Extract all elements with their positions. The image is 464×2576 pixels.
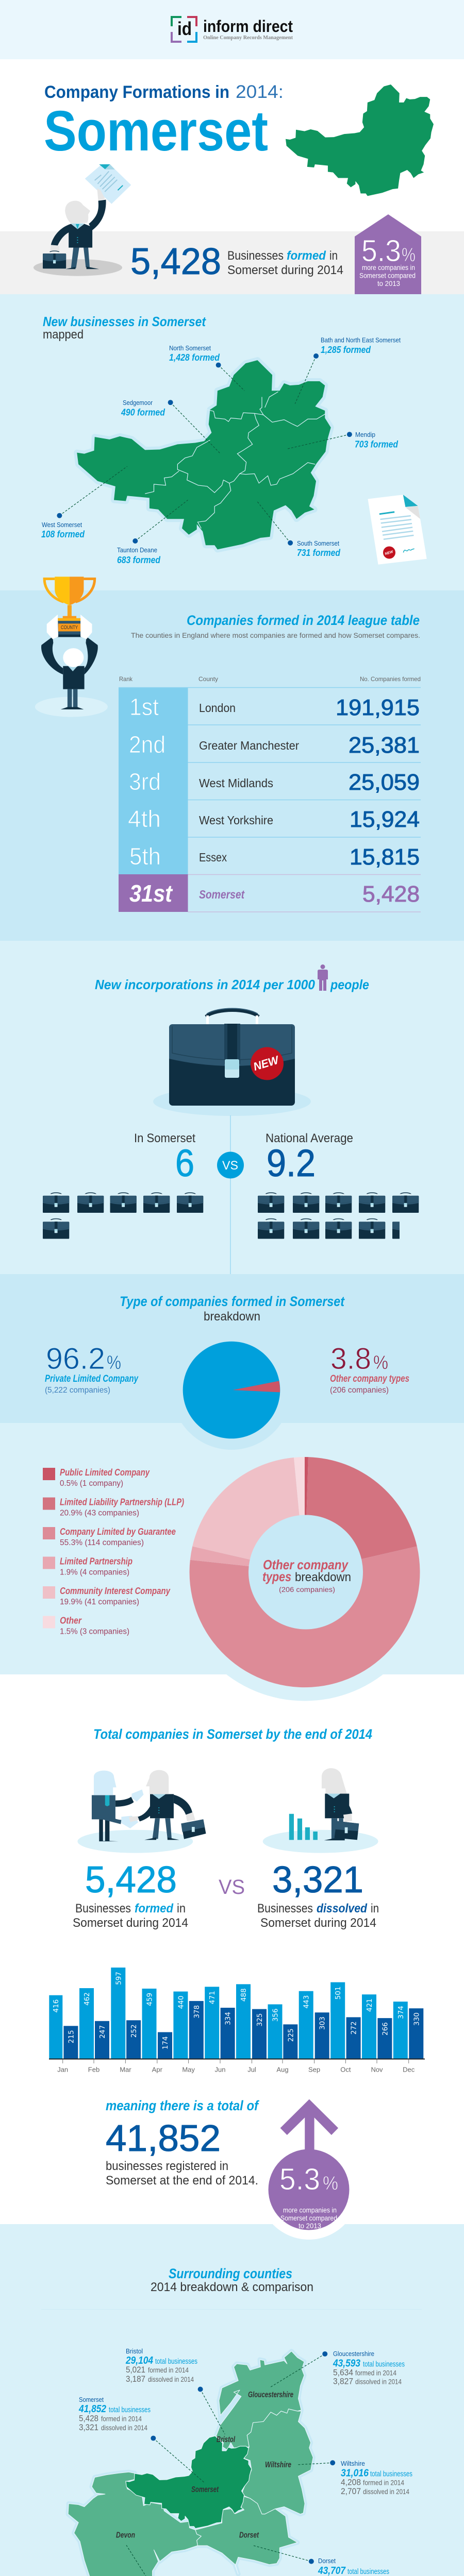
table: companies formed league: 2nd xyxy=(129,731,165,758)
bar chart: monthly formed and dissolved: 356 xyxy=(271,2008,279,2022)
callout: arrow 5.3% growth: 5.3 xyxy=(279,2162,320,2196)
bar chart: monthly formed and dissolved: 325 xyxy=(256,2013,264,2026)
callout: Somerset: dissolved in 2014 xyxy=(101,2424,147,2432)
bar chart: monthly formed and dissolved: 378 xyxy=(193,2005,201,2019)
bar chart: monthly formed and dissolved: 462 xyxy=(83,1992,91,2006)
stat: formed vs dissolved: Somerset during 2014 xyxy=(260,1916,376,1930)
logo: inform direct xyxy=(172,17,293,42)
table: companies formed league: London xyxy=(199,701,236,715)
stat: formed vs dissolved: Businesses xyxy=(75,1902,131,1916)
callout: Bristol: 29,104 xyxy=(125,2355,153,2366)
stat: 5,428 businesses formed: Somerset during 2014 xyxy=(227,263,343,277)
map labels: districts: 1,428 formed xyxy=(169,352,220,363)
bar chart: monthly formed and dissolved: 421 xyxy=(366,1998,374,2012)
table: companies formed league: 191,915 xyxy=(336,695,420,720)
heading: type of companies: Type of companies formed in Somerset xyxy=(120,1294,345,1309)
bar chart: monthly formed and dissolved: 374 xyxy=(397,2006,405,2019)
legend: other company types: 0.5% (1 company) xyxy=(60,1479,123,1488)
title: Company Formations in xyxy=(44,82,229,102)
icon: new company document: NEW xyxy=(385,550,394,556)
callout: 5.3% more companies: Somerset compared xyxy=(359,271,416,279)
table: companies formed league: 15,924 xyxy=(350,807,420,832)
stat: formed vs dissolved: formed xyxy=(135,1902,174,1916)
callout: Somerset: formed in 2014 xyxy=(101,2414,142,2422)
map labels: districts xyxy=(41,336,401,565)
callout: Bristol: 3,187 xyxy=(126,2374,145,2384)
bar chart: monthly formed and dissolved: 440 xyxy=(177,1996,185,2009)
table: companies formed league: County xyxy=(198,675,218,683)
callout: Dorset xyxy=(318,2557,389,2576)
legend: other company types: Company Limited by Guarantee xyxy=(60,1527,176,1537)
callout: Dorset: Dorset xyxy=(318,2557,336,2565)
stat: 5,428 businesses formed: formed xyxy=(287,249,326,263)
illustration: man holding county trophy xyxy=(35,577,108,717)
callout: arrow 5.3% growth: Somerset compared xyxy=(280,2214,337,2222)
bar chart: monthly formed and dissolved: Mar xyxy=(120,2066,131,2073)
callout: Somerset: 3,321 xyxy=(79,2422,98,2432)
stat: formed vs dissolved: 3,321 xyxy=(272,1859,363,1901)
map: surrounding counties: Somerset xyxy=(191,2485,219,2494)
callout: Wiltshire: 4,208 xyxy=(341,2477,361,2487)
heading: new incorporations per 1000 people: people xyxy=(330,977,369,992)
heading: surrounding counties: 2014 breakdown & comparison xyxy=(151,2280,313,2294)
callout: 5.3% more companies xyxy=(355,214,421,294)
table: companies formed league: Rank xyxy=(119,675,133,683)
table: companies formed league: Greater Manchester xyxy=(199,739,299,752)
stat: 5,428 businesses formed xyxy=(130,241,343,282)
table: companies formed league: 4th xyxy=(128,805,161,832)
illustration: businessman holding certificate xyxy=(34,164,131,276)
callout: Bristol: Bristol xyxy=(126,2347,143,2355)
callout: 5.3% more companies: 5.3 xyxy=(361,234,401,268)
illustration: man holding county trophy: COUNTY xyxy=(61,625,78,631)
callout: Gloucestershire: dissolved in 2014 xyxy=(355,2378,402,2386)
bar chart: monthly formed and dissolved: Nov xyxy=(371,2066,383,2073)
bar chart: monthly formed and dissolved: 252 xyxy=(130,2024,138,2038)
map labels: districts: South Somerset xyxy=(297,539,339,547)
legend: other company types: Limited Liability Partnership (LLP) xyxy=(60,1497,184,1507)
callout: arrow 5.3% growth: to 2013 xyxy=(299,2222,321,2230)
heading: new businesses mapped: New businesses in Somerset xyxy=(43,314,206,329)
callout: 5.3% more companies: % xyxy=(402,244,416,266)
legend: other company types: Other xyxy=(60,1616,82,1626)
map: surrounding counties: Devon xyxy=(116,2531,135,2540)
heading: companies formed league table: Companies formed in 2014 league table xyxy=(187,613,420,628)
map labels: districts: Mendip xyxy=(355,431,375,438)
callout: Wiltshire xyxy=(341,2460,412,2496)
title: 2014: xyxy=(236,82,284,102)
callout: Somerset xyxy=(78,2396,151,2432)
map labels: districts: North Somerset xyxy=(169,344,211,352)
callout: Bristol: 5,021 xyxy=(126,2365,145,2375)
legend: other company types: 55.3% (114 companies) xyxy=(60,1538,144,1547)
table: companies formed league: West Yorkshire xyxy=(199,814,273,827)
bar chart: monthly formed and dissolved: Dec xyxy=(403,2066,415,2073)
map: surrounding counties xyxy=(68,2351,335,2576)
stat: 41,852 total businesses: 41,852 xyxy=(106,2118,221,2159)
stat: formed vs dissolved: Somerset during 2014 xyxy=(73,1916,188,1930)
stat: 41,852 total businesses: businesses registered in xyxy=(106,2159,228,2173)
map labels: districts: 1,285 formed xyxy=(321,345,371,355)
map labels: districts: Sedgemoor xyxy=(123,399,153,406)
heading: type of companies: breakdown xyxy=(204,1310,260,1324)
bar chart: monthly formed and dissolved: May xyxy=(182,2066,195,2073)
bar chart: monthly formed and dissolved: 247 xyxy=(98,2025,107,2039)
legend: other company types xyxy=(43,1467,184,1636)
callout: arrow 5.3% growth: % xyxy=(323,2173,338,2194)
stat: formed vs dissolved: VS xyxy=(219,1876,245,1899)
pictogram: briefcases national 9.2 xyxy=(258,1192,419,1239)
pictogram: briefcases Somerset 6 xyxy=(43,1192,203,1239)
callout: 5.3% more companies: to 2013 xyxy=(377,279,400,287)
comparison: incorporations per 1000: National Average xyxy=(266,1131,353,1145)
table: companies formed league: 25,059 xyxy=(349,770,420,795)
table: companies formed league: 31st xyxy=(129,880,173,907)
callout: Gloucestershire: total businesses xyxy=(363,2360,405,2368)
stat: 41,852 total businesses xyxy=(106,2098,260,2188)
callout: Wiltshire: formed in 2014 xyxy=(363,2478,404,2486)
table: companies formed league: West Midlands xyxy=(199,776,273,790)
bar chart: monthly formed and dissolved: Sep xyxy=(308,2066,320,2073)
map labels: districts: 108 formed xyxy=(41,529,85,539)
map labels: districts: 731 formed xyxy=(297,548,341,558)
map: surrounding counties: Gloucestershire xyxy=(248,2391,293,2399)
comparison: incorporations per 1000 xyxy=(134,1115,353,1274)
stat: formed vs dissolved: in xyxy=(177,1902,186,1916)
callout: Gloucestershire: 5,634 xyxy=(333,2368,353,2378)
legend: other company types: Community Interest Company xyxy=(60,1586,171,1596)
table: companies formed league: Somerset xyxy=(199,888,245,901)
donut chart: other company types: types xyxy=(262,1569,291,1584)
map labels: districts: Bath and North East Somerset xyxy=(321,336,401,344)
bar chart: monthly formed and dissolved: 443 xyxy=(303,1995,311,2008)
map labels: districts: 490 formed xyxy=(121,407,165,417)
pie chart: company types xyxy=(172,1330,291,1450)
callout: arrow 5.3% growth: more companies in xyxy=(283,2206,337,2214)
stat: formed vs dissolved: 5,428 xyxy=(85,1859,177,1901)
comparison: incorporations per 1000: In Somerset xyxy=(134,1131,195,1145)
stat: formed vs dissolved: in xyxy=(371,1902,379,1916)
bar chart: monthly formed and dissolved: 272 xyxy=(350,2021,358,2035)
callout: Somerset: total businesses xyxy=(109,2405,151,2414)
stat: formed vs dissolved: dissolved xyxy=(317,1902,368,1916)
bar chart: monthly formed and dissolved: 330 xyxy=(412,2012,421,2026)
bar chart: monthly formed and dissolved: 597 xyxy=(114,1972,123,1985)
map labels: districts: Taunton Deane xyxy=(117,546,157,554)
bar chart: monthly formed and dissolved: 303 xyxy=(319,2016,327,2030)
heading: type of companies xyxy=(120,1294,345,1324)
callout: Wiltshire: 31,016 xyxy=(341,2467,369,2479)
legend: other company types: 19.9% (41 companies) xyxy=(60,1598,139,1606)
heading: new incorporations per 1000 people xyxy=(95,964,369,992)
callout: 5.3% more companies: more companies in xyxy=(362,263,415,272)
bar chart: monthly formed and dissolved: 215 xyxy=(67,2030,75,2043)
bar chart: monthly formed and dissolved: 488 xyxy=(240,1988,248,2002)
bar chart: monthly formed and dissolved: Feb xyxy=(88,2066,100,2073)
legend: other company types: 1.5% (3 companies) xyxy=(60,1627,129,1636)
stat: formed vs dissolved: Businesses xyxy=(257,1902,313,1916)
table: companies formed league: 25,381 xyxy=(349,733,420,758)
map labels: districts: 703 formed xyxy=(355,439,399,449)
stat: private limited share: (5,222 companies) xyxy=(45,1386,110,1395)
illustration: man with falling bars xyxy=(263,1768,378,1853)
callout: Wiltshire: Wiltshire xyxy=(341,2460,365,2467)
map labels: districts: 683 formed xyxy=(117,555,161,565)
map: surrounding counties: Bristol xyxy=(217,2435,235,2444)
stat: other company types share xyxy=(330,1342,409,1395)
donut chart: other company types: (206 companies) xyxy=(279,1585,335,1594)
table: companies formed league: 1st xyxy=(129,693,159,720)
stat: other company types share: 3.8 xyxy=(330,1342,371,1376)
callout: Somerset: 5,428 xyxy=(79,2413,98,2424)
callout: Somerset: Somerset xyxy=(79,2396,104,2403)
bar chart: monthly formed and dissolved: 471 xyxy=(208,1991,217,2004)
stat: private limited share: 96.2 xyxy=(46,1342,105,1376)
map labels: districts: West Somerset xyxy=(42,521,82,529)
callout: Gloucestershire: 43,593 xyxy=(333,2358,360,2369)
table: companies formed league: 15,815 xyxy=(350,844,420,870)
callout: Gloucestershire xyxy=(333,2350,405,2386)
table: companies formed league: 5th xyxy=(129,843,161,870)
callout: Bristol: formed in 2014 xyxy=(148,2366,189,2374)
icon: big briefcase with new sticker xyxy=(153,1009,311,1116)
stat: 5,428 businesses formed: Businesses xyxy=(227,249,284,263)
bar chart: monthly formed and dissolved: 501 xyxy=(334,1987,342,1999)
table: companies formed league: No. Companies formed xyxy=(360,675,421,683)
callout: Gloucestershire: Gloucestershire xyxy=(333,2350,374,2358)
comparison: incorporations per 1000: 6 xyxy=(175,1142,194,1184)
heading: surrounding counties: Surrounding counties xyxy=(169,2266,292,2281)
title: Somerset xyxy=(44,99,268,163)
stat: other company types share: (206 companies) xyxy=(330,1386,389,1395)
stat: 5,428 businesses formed: in xyxy=(329,249,338,263)
stat: private limited share: % xyxy=(107,1352,121,1374)
comparison: incorporations per 1000: VS xyxy=(222,1159,238,1173)
map: Somerset districts xyxy=(57,353,352,549)
bar chart: monthly formed and dissolved: 416 xyxy=(52,1999,60,2012)
donut chart: other company types: breakdown xyxy=(295,1570,351,1584)
hero map of Somerset xyxy=(286,84,434,196)
bar chart: monthly formed and dissolved: Oct xyxy=(340,2066,351,2073)
table: companies formed league: 3rd xyxy=(129,768,161,795)
stat: private limited share xyxy=(45,1342,139,1395)
callout: Bristol xyxy=(125,2347,197,2384)
heading: new incorporations per 1000 people: New incorporations in 2014 per 1000 xyxy=(95,977,316,992)
donut chart: other company types: Other company xyxy=(263,1557,349,1572)
table: companies formed league: Essex xyxy=(199,851,227,864)
illustration: handshake xyxy=(77,1770,206,1853)
bar chart: monthly formed and dissolved xyxy=(49,1968,425,2073)
table: companies formed league xyxy=(119,675,421,912)
callout: arrow 5.3% growth xyxy=(259,2099,359,2240)
stat: private limited share: Private Limited Company xyxy=(45,1374,139,1384)
icon: new company document xyxy=(368,495,427,565)
heading: companies formed league table xyxy=(131,613,420,639)
legend: other company types: Limited Partnership xyxy=(60,1556,132,1566)
logo: inform direct: inform direct xyxy=(203,17,293,36)
map: surrounding counties: Wiltshire xyxy=(265,2461,291,2469)
callout: Wiltshire: total businesses xyxy=(370,2469,412,2478)
callout: Bristol: dissolved in 2014 xyxy=(148,2375,194,2383)
legend: other company types: Public Limited Company xyxy=(60,1467,150,1478)
donut chart: other company types xyxy=(176,1444,434,1701)
stat: 5,428 businesses formed: 5,428 xyxy=(130,241,221,282)
callout: Wiltshire: 2,707 xyxy=(341,2486,361,2496)
legend: other company types: 20.9% (43 companies) xyxy=(60,1509,139,1518)
stat: 41,852 total businesses: meaning there is a total of xyxy=(106,2098,260,2113)
bar chart: monthly formed and dissolved: Jul xyxy=(247,2066,256,2073)
bar chart: monthly formed and dissolved: Jan xyxy=(57,2066,68,2073)
bar chart: monthly formed and dissolved: Jun xyxy=(215,2066,225,2073)
icon: big briefcase with new sticker: NEW xyxy=(252,1053,281,1073)
heading: total companies by end of 2014: Total companies in Somerset by the end of 2014 xyxy=(93,1726,372,1742)
comparison: incorporations per 1000: 9.2 xyxy=(267,1142,316,1184)
bar chart: monthly formed and dissolved: Apr xyxy=(152,2066,163,2073)
stat: other company types share: % xyxy=(373,1352,388,1374)
heading: companies formed league table: The counties in England where most companies are formed and how Somerset compares. xyxy=(131,632,420,639)
bar chart: monthly formed and dissolved: 174 xyxy=(161,2036,170,2049)
stat: other company types share: Other company types xyxy=(330,1374,409,1384)
logo: inform direct: Online Company Records Management xyxy=(203,35,293,41)
heading: new businesses mapped xyxy=(43,314,206,342)
bar chart: monthly formed and dissolved: Aug xyxy=(276,2066,289,2073)
bar chart: monthly formed and dissolved: 266 xyxy=(381,2022,389,2036)
stat: 41,852 total businesses: Somerset at the end of 2014. xyxy=(106,2174,258,2188)
callout: Dorset: total businesses xyxy=(347,2567,389,2576)
callout: Wiltshire: dissolved in 2014 xyxy=(363,2487,409,2496)
bar chart: monthly formed and dissolved: 459 xyxy=(145,1993,154,2006)
stat: formed vs dissolved xyxy=(73,1859,379,1930)
table: companies formed league: 5,428 xyxy=(362,882,420,907)
heading: new businesses mapped: mapped xyxy=(43,328,84,342)
callout: Bristol: total businesses xyxy=(155,2357,197,2366)
bar chart: monthly formed and dissolved: 225 xyxy=(287,2028,295,2042)
logo: inform direct: id xyxy=(177,18,192,39)
callout: Gloucestershire: 3,827 xyxy=(333,2377,353,2386)
bar chart: monthly formed and dissolved: 334 xyxy=(224,2012,233,2025)
callout: Somerset: 41,852 xyxy=(78,2403,106,2415)
legend: other company types: 1.9% (4 companies) xyxy=(60,1568,129,1577)
callout: Gloucestershire: formed in 2014 xyxy=(355,2369,396,2377)
map: surrounding counties: Dorset xyxy=(239,2531,259,2540)
heading: surrounding counties xyxy=(41,2266,422,2309)
